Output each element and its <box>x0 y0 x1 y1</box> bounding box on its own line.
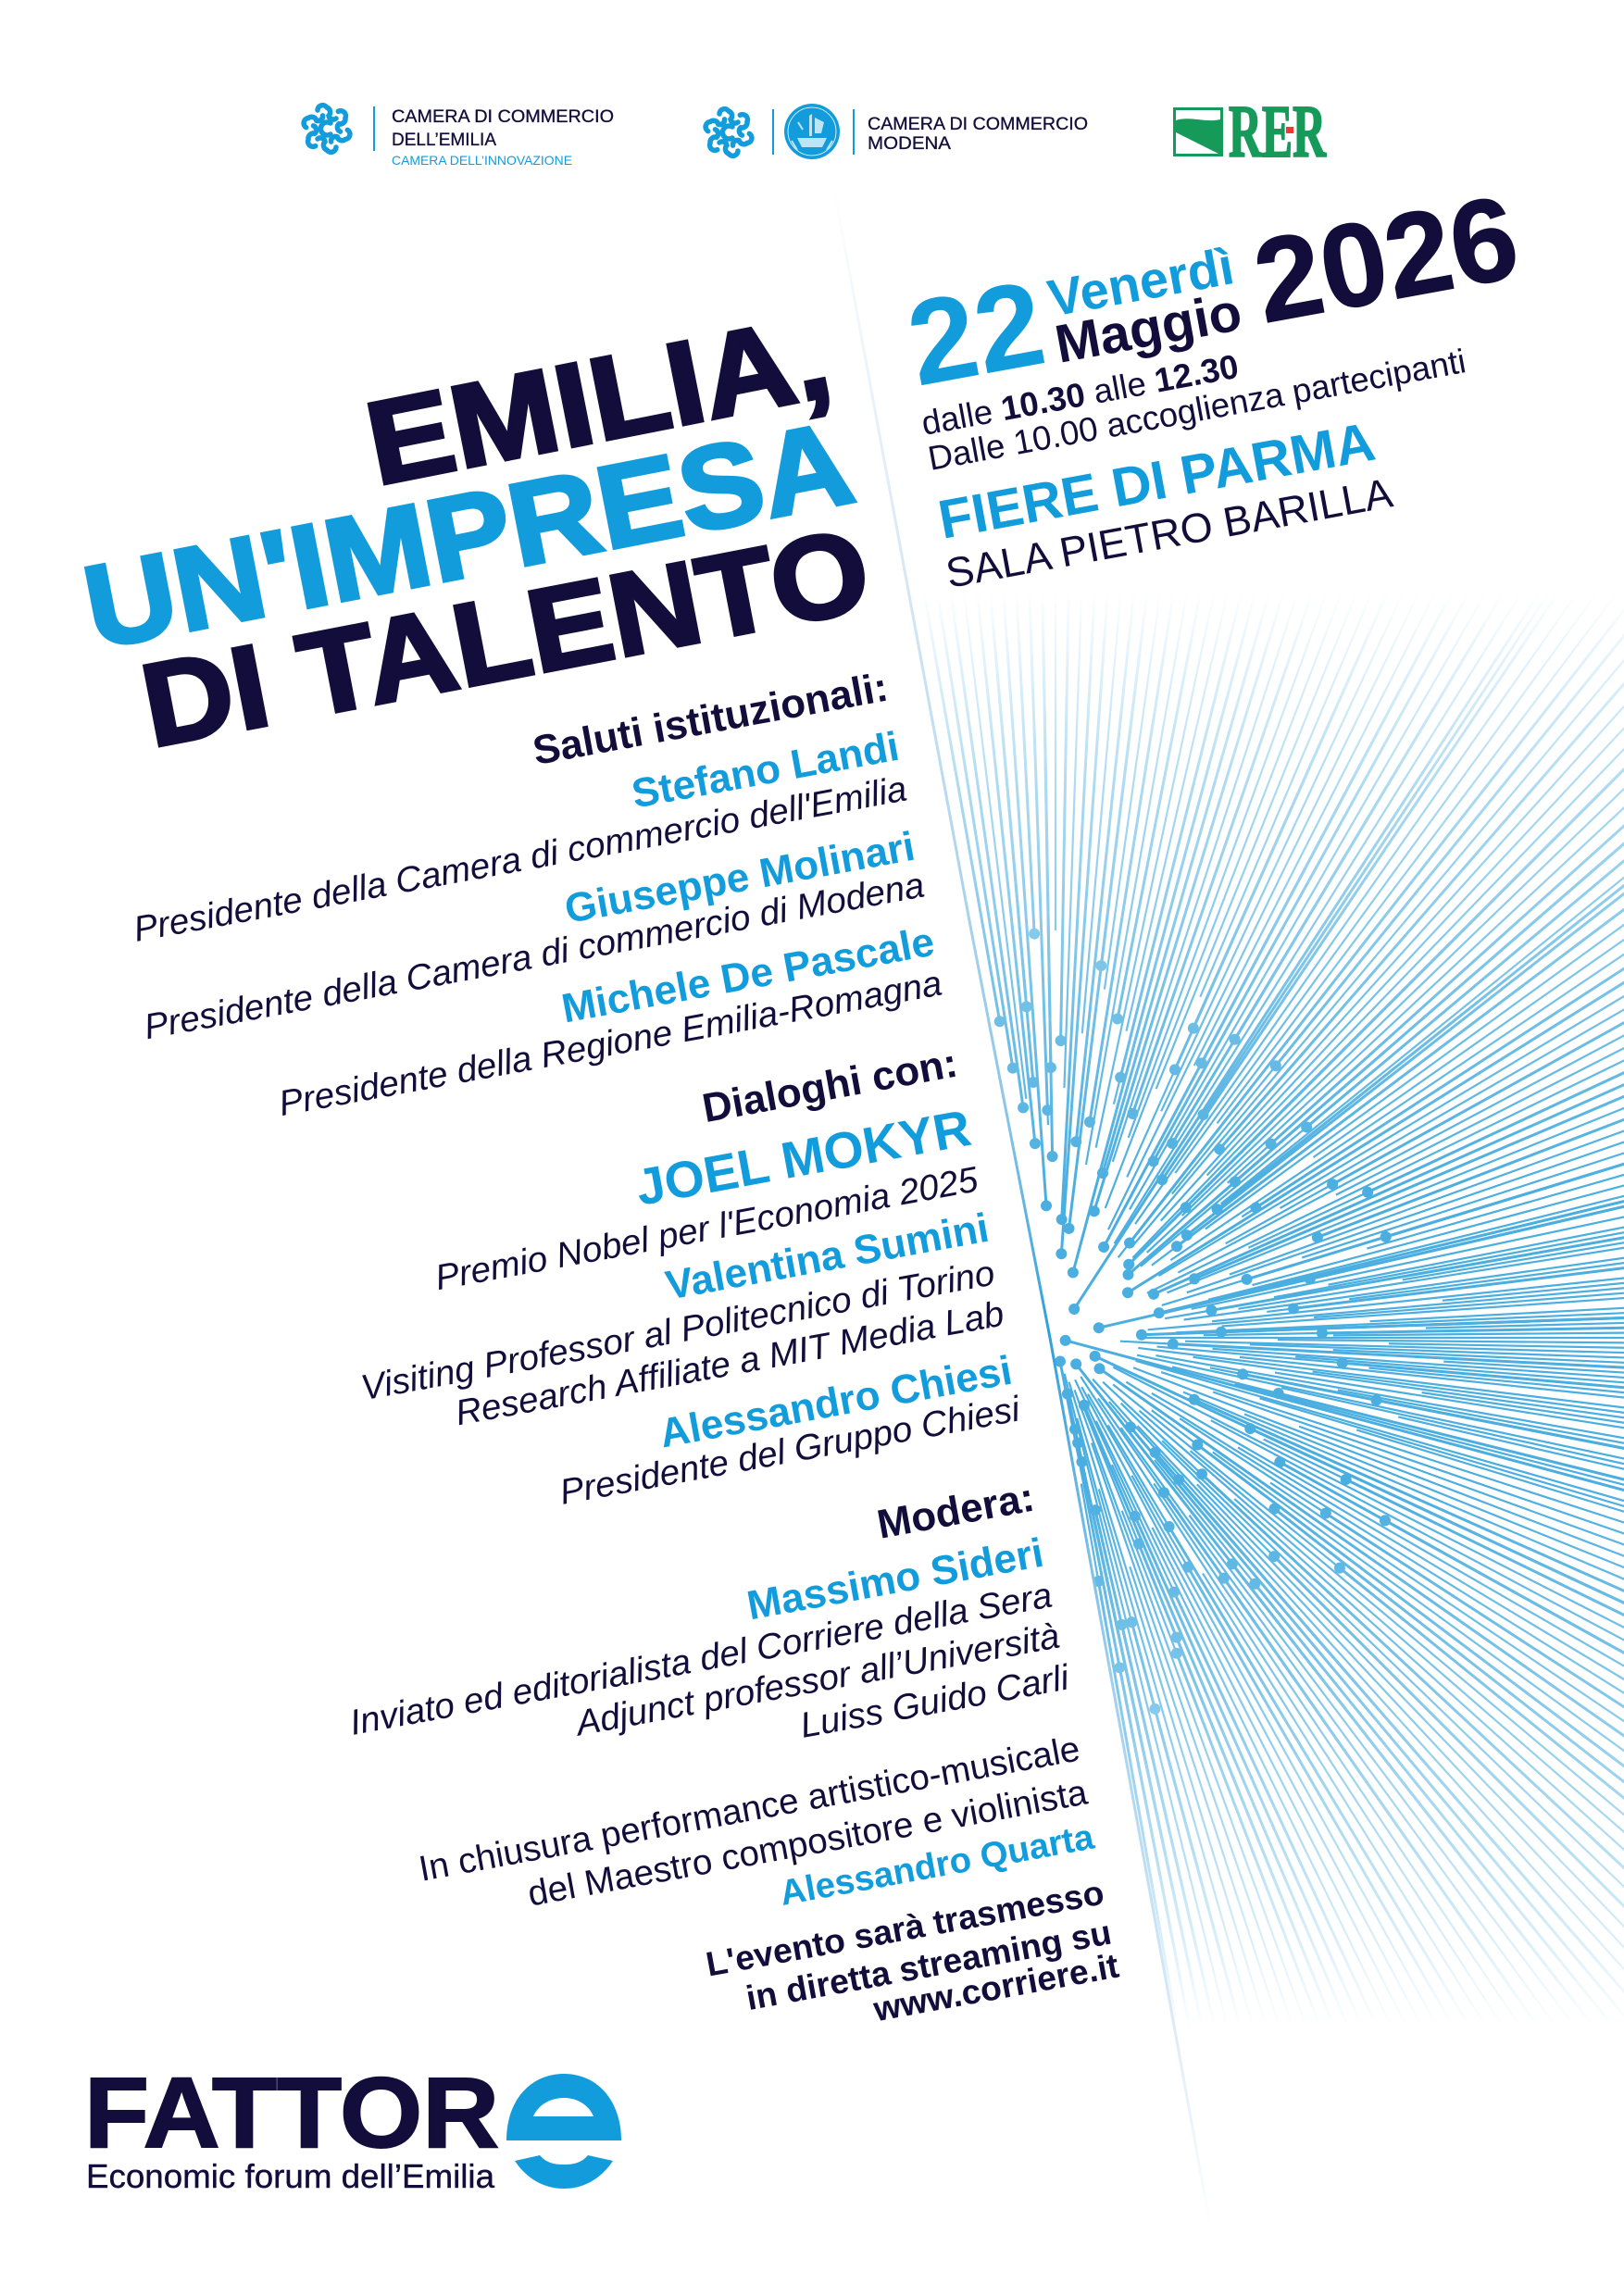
logo: Camera di commercio dell'Emilia: CAMERA DI COMMERCIO <box>392 107 614 127</box>
streaming note: L'evento sarà trasmesso <box>703 1873 1106 1984</box>
diagonal divider line <box>834 190 1210 2226</box>
section: Saluti istituzionali: Giuseppe Molinari <box>561 824 918 932</box>
venue: FIERE DI PARMA <box>933 411 1380 551</box>
logo: Camera di commercio dell'Emilia <box>302 106 614 168</box>
logo: Camera di commercio Modena: MODENA <box>868 134 951 154</box>
section: Dialoghi con: JOEL MOKYR <box>631 1099 975 1217</box>
section: Modera: Modera: <box>874 1475 1038 1548</box>
date block: 22 <box>898 255 1054 412</box>
streaming note <box>703 1873 1121 2028</box>
section: Saluti istituzionali: Presidente della Regione Emilia-Romagna <box>276 964 945 1124</box>
logo: Fattore Economic forum dell'Emilia <box>84 2056 621 2195</box>
title: EMILIA, <box>356 290 841 509</box>
time block: dalle 10.30 alle 12.30 <box>918 347 1242 443</box>
light burst graphic <box>926 611 1624 2009</box>
section: Modera: Luiss Guido Carli <box>797 1657 1073 1746</box>
logo: Fattore Economic forum dell'Emilia: FATTOR <box>84 2056 499 2168</box>
logo: Camera di commercio dell'Emilia: CAMERA DELL’INNOVAZIONE <box>392 153 572 168</box>
section: Saluti istituzionali <box>131 665 945 1124</box>
title: DI TALENTO <box>131 504 880 772</box>
section: Dialoghi con: Dialoghi con: <box>699 1041 961 1131</box>
section: Saluti istituzionali: Michele De Pascale <box>558 919 938 1031</box>
closing performance note: In chiusura performance artistico-musicale <box>416 1729 1083 1890</box>
title: UN'IMPRESA <box>74 396 863 674</box>
section: Dialoghi con: Research Affiliate a MIT Media Lab <box>453 1294 1007 1433</box>
date block: Venerdì <box>1043 236 1238 328</box>
date block <box>898 170 1528 412</box>
section: Modera: Adjunct professor all’Università <box>571 1616 1063 1744</box>
section: Dialoghi con: Valentina Sumini <box>662 1205 993 1309</box>
section: Saluti istituzionali: Stefano Landi <box>629 724 903 817</box>
logo: Camera di commercio dell'Emilia: DELL’EMILIA <box>392 131 496 150</box>
section: Modera: Massimo Sideri <box>743 1530 1047 1628</box>
section: Dialoghi con <box>358 1041 1024 1513</box>
section: Modera: Inviato ed editorialista del Corriere della Sera <box>347 1576 1056 1743</box>
logo: RER Regione Emilia-Romagna <box>1174 92 1327 173</box>
logo: Camera di commercio Modena <box>704 104 1088 159</box>
closing performance note: del Maestro compositore e violinista <box>525 1772 1091 1915</box>
date block: 2026 <box>1244 170 1528 349</box>
section: Dialoghi con: Alessandro Chiesi <box>656 1348 1016 1456</box>
date block: Maggio <box>1051 281 1246 375</box>
logo: Camera di commercio Modena: CAMERA DI COMMERCIO <box>868 115 1088 134</box>
logo: RER Regione Emilia-Romagna: RER <box>1229 92 1327 173</box>
streaming note: www.corriere.it <box>869 1946 1121 2028</box>
section: Modera <box>347 1475 1073 1746</box>
section: Dialoghi con: Presidente del Gruppo Chiesi <box>556 1389 1024 1513</box>
closing performance note: Alessandro Quarta <box>777 1816 1097 1914</box>
streaming note: in diretta streaming su <box>743 1913 1114 2017</box>
section: Dialoghi con: Visiting Professor al Politecnico di Torino <box>358 1254 998 1408</box>
time block: Dalle 10.00 accoglienza partecipanti <box>925 342 1468 478</box>
logo: Fattore Economic forum dell'Emilia: Economic forum dell’Emilia <box>86 2157 495 2195</box>
section: Saluti istituzionali: Presidente della Camera di commercio di Modena <box>141 866 928 1047</box>
section: Dialoghi con: Premio Nobel per l'Economia 2025 <box>432 1159 981 1298</box>
section: Saluti istituzionali: Presidente della Camera di commercio dell'Emilia <box>131 769 910 950</box>
section: Saluti istituzionali: Saluti istituzionali: <box>530 665 892 774</box>
venue: SALA PIETRO BARILLA <box>943 468 1396 597</box>
title <box>74 290 880 772</box>
